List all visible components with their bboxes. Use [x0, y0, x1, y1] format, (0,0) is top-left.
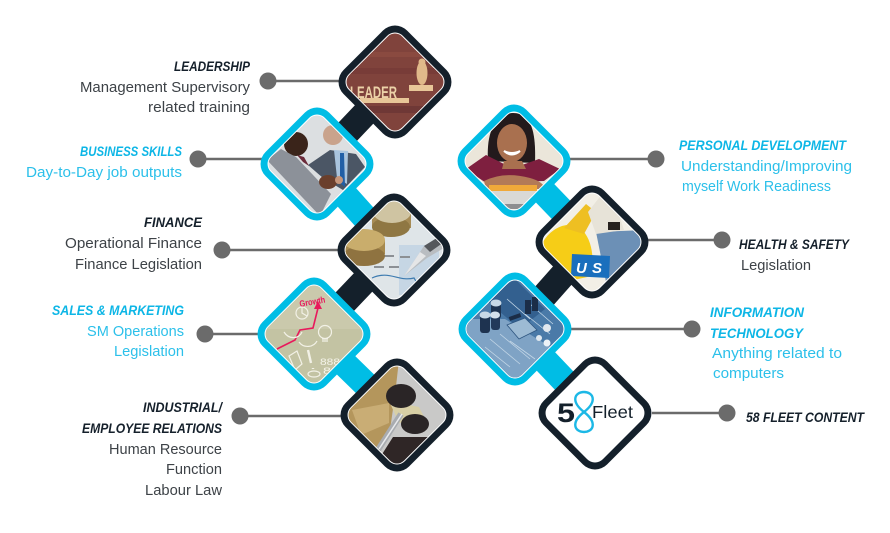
- text: leadership: LEADERSHIP: [174, 59, 251, 74]
- text: information technology: INFORMATION: [710, 305, 804, 320]
- connector: information technology to 58 Fleet: [515, 329, 595, 413]
- text: industrial and employee relations: [82, 400, 223, 499]
- text: personal development: PERSONAL DEVELOPMENT: [679, 138, 848, 153]
- text: information technology: TECHNOLOGY: [710, 326, 805, 341]
- text: sales and marketing: [52, 303, 184, 360]
- text: finance: Operational Finance: [65, 235, 202, 252]
- text: leadership: Management Supervisory: [80, 79, 250, 96]
- text: finance: FINANCE: [144, 215, 203, 230]
- text: health and safety: [739, 237, 851, 274]
- text: finance: [65, 215, 203, 273]
- connector: leadership to business skills: [317, 82, 395, 164]
- connector: finance to sales and marketing: [314, 250, 394, 334]
- text: industrial and employee relations: EMPLOYEE RELATIONS: [82, 421, 222, 436]
- text: industrial and employee relations: INDUSTRIAL/: [143, 400, 223, 415]
- diamond: business skills photo: [260, 108, 374, 220]
- text: health and safety: Legislation: [741, 257, 811, 274]
- text: business skills: Day-to-Day job outputs: [26, 164, 182, 181]
- text: industrial and employee relations: Labour Law: [145, 482, 222, 499]
- text: personal development: [679, 138, 852, 195]
- diamond: sales and marketing photo: 888: [320, 357, 340, 368]
- diamond: health and safety photo: U S: [576, 260, 602, 277]
- text: sales and marketing: SM Operations: [87, 323, 184, 340]
- text: industrial and employee relations: Human Resource: [109, 441, 222, 458]
- diamond: sales and marketing photo: [258, 278, 370, 390]
- text: personal development: myself Work Readiness: [682, 178, 831, 195]
- diamond: 58 Fleet logo: 5: [557, 398, 575, 428]
- diamond: finance photo: [338, 194, 450, 306]
- text: information technology: [710, 305, 842, 382]
- diamond: health and safety photo: [536, 186, 648, 298]
- leader line: health and safety: [646, 232, 730, 248]
- leader line: finance: [214, 242, 340, 258]
- leader line: business skills: [190, 150, 268, 168]
- diamond: leader photo: LEADER: [350, 83, 397, 102]
- leader line: leadership: [260, 72, 342, 90]
- text: leadership: related training: [148, 99, 250, 116]
- text: business skills: BUSINESS SKILLS: [80, 144, 182, 159]
- text: finance: Finance Legislation: [75, 256, 202, 273]
- leader line: industrial relations: [232, 408, 344, 424]
- connector: business skills to finance: [317, 164, 394, 250]
- text: sales and marketing: Legislation: [114, 343, 184, 360]
- text: leadership: [80, 59, 251, 116]
- text: business skills: [26, 144, 182, 181]
- leader line: personal development: [568, 150, 664, 168]
- diamond: industrial relations photo: [340, 358, 454, 472]
- diamond: 58 Fleet logo: [532, 350, 658, 476]
- connector: health and safety to information technology: [515, 242, 592, 329]
- text: 58 Fleet content: 58 FLEET CONTENT: [746, 410, 866, 425]
- leader line: information technology: [569, 320, 700, 338]
- text: industrial and employee relations: Function: [166, 461, 222, 478]
- text: health and safety: HEALTH & SAFETY: [739, 237, 851, 252]
- diamond: sales and marketing photo: 88: [323, 366, 339, 377]
- diamond: information technology photo: [458, 272, 572, 386]
- text: information technology: computers: [713, 365, 784, 382]
- diamond: sales and marketing photo: Growth: [299, 295, 326, 309]
- text: personal development: Understanding/Improving: [681, 158, 852, 175]
- leader line: 58 Fleet: [652, 404, 736, 422]
- diamond: leader photo: [338, 26, 452, 138]
- connector: sales and marketing to industrial relations: [314, 334, 397, 415]
- text: information technology: Anything related to: [712, 345, 842, 362]
- diamond: 58 Fleet logo: Fleet: [592, 402, 633, 422]
- connector: personal development to health and safety: [514, 161, 592, 242]
- leader line: sales and marketing: [196, 326, 260, 342]
- text: sales and marketing: SALES & MARKETING: [52, 303, 184, 318]
- diamond: personal development photo: [458, 104, 570, 218]
